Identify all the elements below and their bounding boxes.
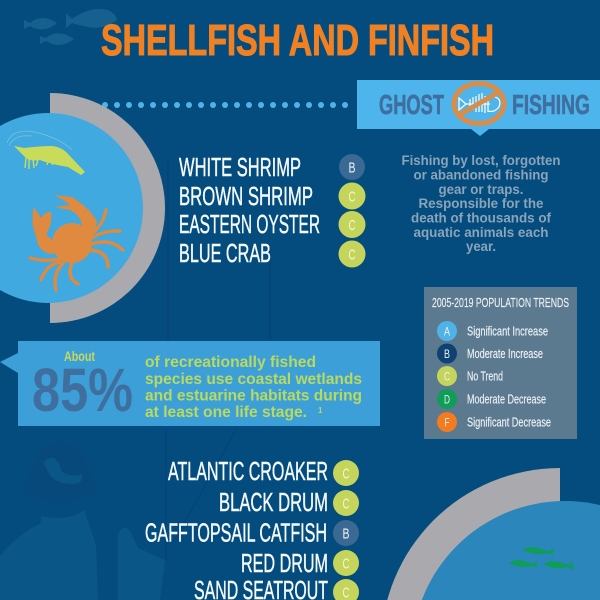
shellfish trend badges: B xyxy=(348,160,356,176)
finfish trend badges: C xyxy=(342,496,350,512)
finfish species list: GAFFTOPSAIL CATFISH xyxy=(145,518,327,548)
big number: 85% xyxy=(32,356,133,424)
background silhouette: fisherman with rod xyxy=(0,160,270,600)
callout text xyxy=(145,354,362,421)
finfish species list xyxy=(145,456,328,600)
legend item D: D xyxy=(444,392,450,406)
finfish trend badges: C xyxy=(342,466,350,482)
icon: no fish xyxy=(454,84,504,124)
legend item A: A xyxy=(444,324,450,338)
legend item B: B xyxy=(444,347,450,361)
85 percent callout xyxy=(0,341,380,426)
heading: ghost: GHOST xyxy=(379,89,444,120)
shellfish trend badges: C xyxy=(348,217,356,234)
ghost fishing banner xyxy=(357,80,600,136)
ghost fishing description xyxy=(402,153,560,254)
finfish trend badges xyxy=(333,460,359,600)
ghost fishing description: death of thousands of xyxy=(411,210,552,226)
legend item F: F xyxy=(444,416,450,430)
ghost fishing description: gear or traps. xyxy=(438,182,524,197)
decorative fish school xyxy=(24,9,117,45)
legend: population trends xyxy=(424,287,577,439)
legend item C: C xyxy=(444,370,450,384)
callout text: species use coastal wetlands xyxy=(145,371,362,388)
ghost fishing description: aquatic animals each xyxy=(414,225,548,240)
shellfish trend badges: C xyxy=(348,246,356,264)
finfish trend badges: B xyxy=(342,526,350,542)
callout text: at least one life stage. xyxy=(145,404,307,421)
shellfish species list: BROWN SHRIMP xyxy=(179,181,313,211)
legend item F xyxy=(437,412,551,432)
shellfish circle graphic xyxy=(0,93,165,323)
finfish circle graphic xyxy=(381,468,600,600)
legend item C xyxy=(437,366,503,386)
legend item A xyxy=(437,321,548,341)
finfish trend badges: C xyxy=(342,556,350,572)
finfish species list: BLACK DRUM xyxy=(219,487,328,517)
shellfish species list: BLUE CRAB xyxy=(179,238,271,268)
label: about: About xyxy=(64,348,95,364)
ghost fishing description: or abandoned fishing xyxy=(414,168,548,182)
ghost fishing description: Responsible for the xyxy=(418,196,544,211)
icon: crab xyxy=(30,195,123,290)
shellfish trend badges xyxy=(338,154,366,268)
legend item B: Moderate Increase xyxy=(467,346,543,361)
shellfish species list: WHITE SHRIMP xyxy=(179,152,301,182)
legend item F: Significant Decrease xyxy=(467,414,551,430)
callout text: 1 xyxy=(318,406,323,415)
legend item C: No Trend xyxy=(467,368,503,384)
finfish species list: RED DRUM xyxy=(241,548,328,578)
legend item D xyxy=(437,389,546,409)
shellfish trend badges: C xyxy=(348,188,356,206)
legend item D: Moderate Decrease xyxy=(467,392,546,406)
finfish species list: ATLANTIC CROAKER xyxy=(168,456,328,486)
icon: green fish xyxy=(509,547,573,570)
ghost fishing description: Fishing by lost, forgotten xyxy=(402,153,560,168)
callout text: and estuarine habitats during xyxy=(145,388,362,404)
ghost fishing description: year. xyxy=(466,239,496,254)
shellfish species list xyxy=(179,152,320,268)
legend item A: Significant Increase xyxy=(467,324,548,338)
callout text: of recreationally fished xyxy=(145,354,316,371)
dotted connector line xyxy=(102,102,348,108)
icon: shrimp xyxy=(7,131,85,175)
legend item B xyxy=(437,344,543,364)
shellfish species list: EASTERN OYSTER xyxy=(179,209,320,239)
